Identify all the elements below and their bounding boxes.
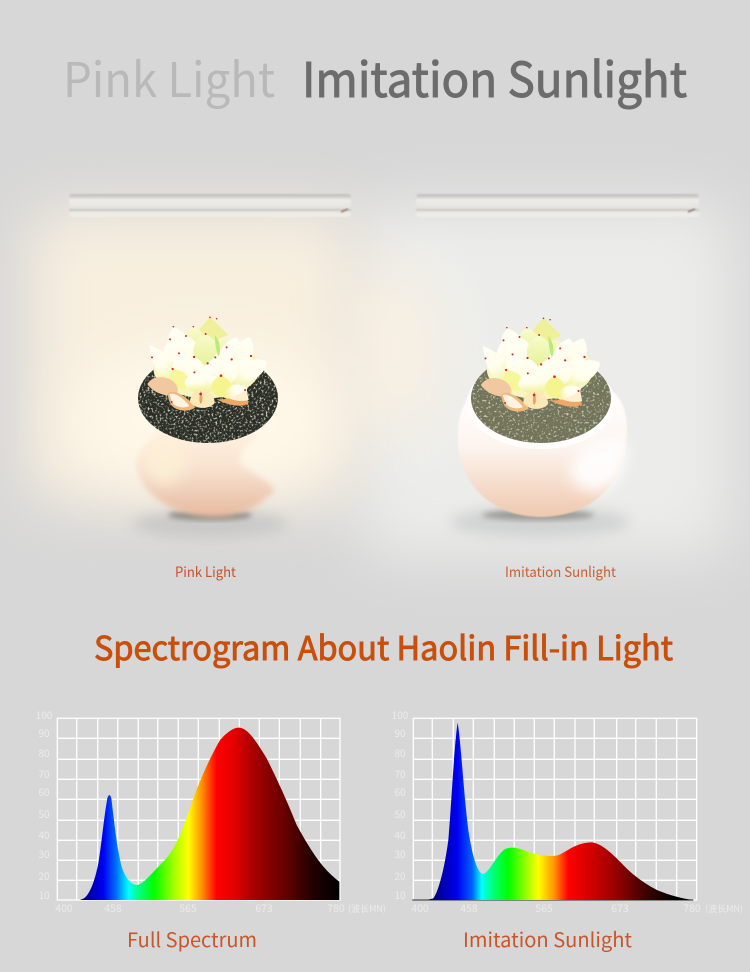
y axis labels: 40 (38, 827, 50, 842)
y axis labels: 30 (38, 846, 50, 861)
y axis labels: 90 (394, 725, 406, 740)
y axis labels: 80 (394, 745, 406, 760)
y axis labels: 60 (38, 784, 50, 799)
x axis labels: 458 (104, 901, 122, 916)
pot highlight (570, 439, 626, 492)
y axis labels: 20 (394, 868, 406, 883)
warm light glow (28, 210, 353, 505)
pot (458, 390, 627, 517)
potted succulent (458, 318, 627, 517)
x axis labels: 673 (255, 901, 273, 916)
y axis labels (392, 707, 409, 902)
pot shadow (450, 507, 630, 537)
spectrum curve (412, 723, 693, 900)
y axis labels: 70 (38, 766, 50, 781)
spectrum curve (80, 728, 339, 900)
x axis labels (411, 901, 743, 916)
potted succulent (136, 317, 278, 517)
caption: full spectrum: Full Spectrum (127, 924, 257, 953)
succulent rosette (146, 317, 271, 411)
y axis labels: 70 (394, 766, 406, 781)
caption: pink light: Pink Light (175, 562, 237, 582)
y axis labels: 10 (38, 887, 50, 902)
x axis labels: 400 (411, 901, 429, 916)
y axis labels: 100 (392, 707, 409, 722)
y axis labels: 30 (394, 846, 406, 861)
x axis labels: 780 (327, 901, 345, 916)
tube lamp (69, 194, 351, 217)
grid (57, 718, 340, 900)
title: pink light: Pink Light (63, 41, 275, 111)
caption: imitation sunlight: Imitation Sunlight (505, 562, 617, 582)
y axis labels: 50 (38, 806, 50, 821)
y axis labels: 50 (394, 806, 406, 821)
pot (136, 430, 275, 517)
white light glow (345, 205, 730, 555)
pot shadow (132, 510, 288, 538)
tube lamp (416, 194, 699, 217)
y axis labels: 80 (38, 745, 50, 760)
pot rim (467, 357, 615, 449)
x axis labels: 400 (55, 901, 73, 916)
chart: full spectrum (36, 707, 386, 916)
y axis labels: 100 (36, 707, 53, 722)
soil (138, 353, 278, 443)
section heading: Spectrogram About Haolin Fill-in Light (94, 622, 673, 670)
pot highlight (145, 440, 185, 484)
soil (471, 353, 611, 443)
panel: imitation sunlight scene (345, 194, 730, 555)
y axis labels: 90 (38, 725, 50, 740)
x axis labels: 673 (611, 901, 629, 916)
chart: imitation sunlight (392, 707, 743, 916)
x axis labels: 565 (179, 901, 197, 916)
y axis labels: 20 (38, 868, 50, 883)
grid (413, 718, 697, 900)
x axis labels: 565 (535, 901, 553, 916)
title: imitation sunlight: Imitation Sunlight (302, 41, 687, 111)
y axis labels: 40 (394, 827, 406, 842)
x axis labels: 458 (460, 901, 478, 916)
y axis labels (36, 707, 53, 902)
title (63, 41, 687, 111)
caption: imitation sunlight spectrum: Imitation Sunlight (463, 924, 632, 953)
x axis labels: (波长MN) (348, 902, 386, 915)
y axis labels: 60 (394, 784, 406, 799)
y axis labels: 10 (394, 887, 406, 902)
succulent rosette (480, 318, 605, 412)
x axis labels: 780 (683, 901, 701, 916)
x axis labels: (波长MN) (705, 902, 743, 915)
x axis labels (55, 901, 386, 916)
panel: pink light scene (28, 194, 353, 538)
